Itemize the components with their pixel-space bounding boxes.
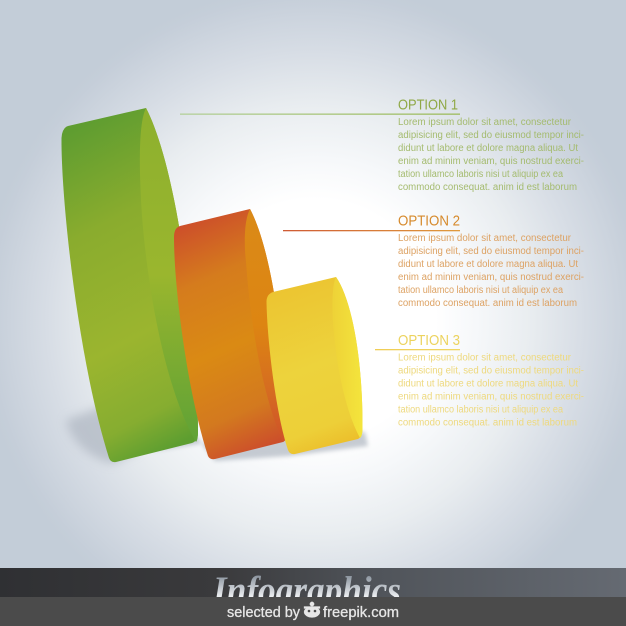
body: option 3: tation ullamco laboris nisi ut aliquip ex ea bbox=[398, 404, 563, 416]
body: option 2: didunt ut labore et dolore magna aliqua. Ut bbox=[398, 259, 578, 270]
body: option 1: Lorem ipsum dolor sit amet, consectetur bbox=[398, 117, 572, 128]
leader line: option 3 bbox=[375, 349, 460, 350]
orange face bbox=[245, 209, 287, 442]
body: option 2: adipisicing elit, sed do eiusmod tempor inci- bbox=[398, 246, 584, 257]
yellow face bbox=[332, 277, 363, 438]
footer band bbox=[0, 568, 626, 626]
body: option 1: didunt ut labore et dolore magna aliqua. Ut bbox=[398, 143, 578, 154]
yellow side bbox=[266, 277, 363, 454]
body: option 3: enim ad minim veniam, quis nostrud exerci- bbox=[398, 392, 584, 402]
body: option 2 bbox=[398, 233, 584, 309]
ground shadow bbox=[66, 405, 368, 464]
footer title: Infographics bbox=[212, 569, 401, 612]
chart: green cylinder bbox=[61, 108, 198, 462]
heading: option 1: OPTION 1 bbox=[398, 98, 458, 114]
green face bbox=[140, 108, 198, 442]
heading: option 3: OPTION 3 bbox=[398, 333, 460, 349]
body: option 1: adipisicing elit, sed do eiusmod tempor inci- bbox=[398, 130, 584, 141]
leader line: option 2 bbox=[283, 230, 460, 231]
body: option 1: commodo consequat. anim id est laborum bbox=[398, 182, 577, 193]
green side bbox=[61, 108, 198, 462]
body: option 3 bbox=[398, 352, 584, 428]
text block: option 3 bbox=[398, 333, 584, 428]
body: option 2: commodo consequat. anim id est laborum bbox=[398, 298, 577, 309]
footer credit bbox=[227, 602, 399, 621]
body: option 3: didunt ut labore et dolore magna aliqua. Ut bbox=[398, 378, 578, 390]
body: option 3: adipisicing elit, sed do eiusmod tempor inci- bbox=[398, 366, 584, 376]
leader line: option 1 bbox=[180, 114, 460, 115]
body: option 2: enim ad minim veniam, quis nostrud exerci- bbox=[398, 272, 584, 283]
body: option 1: enim ad minim veniam, quis nostrud exerci- bbox=[398, 156, 584, 167]
chart: yellow cylinder bbox=[266, 277, 363, 454]
body: option 3: commodo consequat. anim id est laborum bbox=[398, 418, 577, 428]
body: option 2: tation ullamco laboris nisi ut aliquip ex ea bbox=[398, 285, 563, 296]
body: option 3: Lorem ipsum dolor sit amet, consectetur bbox=[398, 352, 572, 364]
icon: freepik mascot bbox=[304, 602, 320, 618]
footer credit: freepik.com bbox=[323, 605, 399, 621]
chart: orange cylinder bbox=[174, 209, 287, 459]
body: option 1 bbox=[398, 117, 584, 193]
text block: option 1 bbox=[398, 98, 584, 193]
footer credit: selected by bbox=[227, 605, 301, 621]
orange side bbox=[174, 209, 287, 459]
heading: option 2: OPTION 2 bbox=[398, 214, 460, 230]
text block: option 2 bbox=[398, 214, 584, 309]
body: option 1: tation ullamco laboris nisi ut aliquip ex ea bbox=[398, 169, 563, 180]
body: option 2: Lorem ipsum dolor sit amet, consectetur bbox=[398, 233, 572, 244]
